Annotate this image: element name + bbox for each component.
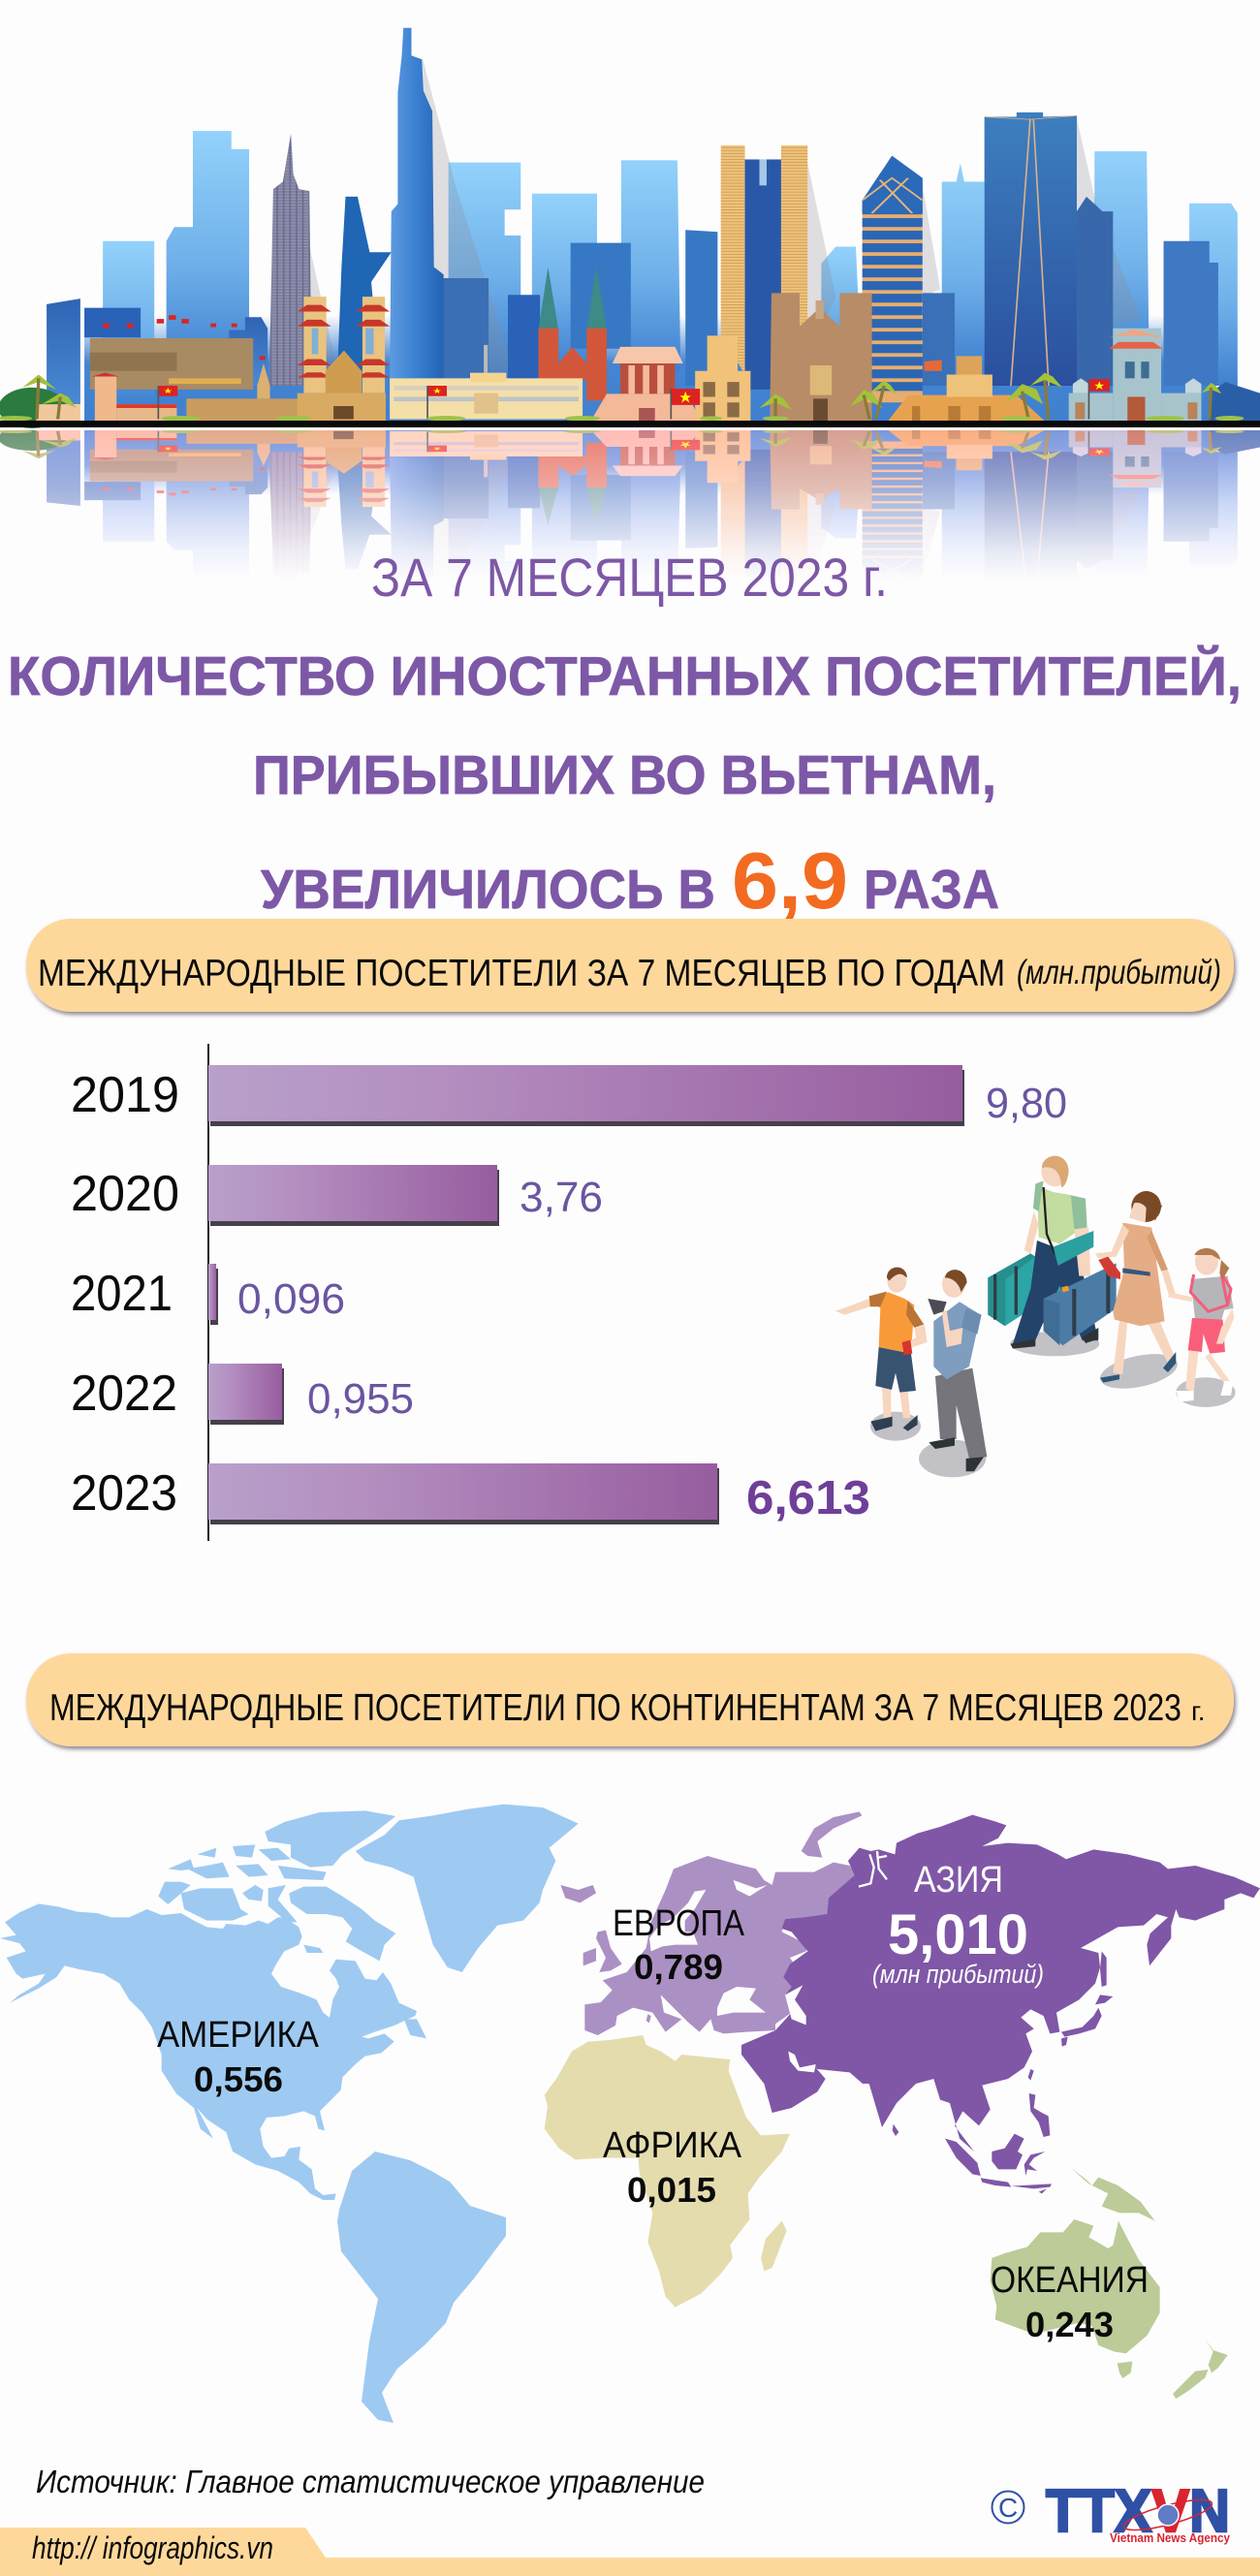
label: Europe: 0,789 — [634, 1947, 723, 1987]
label: Americas: АМЕРИКА — [157, 2015, 320, 2056]
label: Oceania — [991, 2260, 1149, 2344]
illustration: mirrored skyline reflection — [0, 430, 1260, 572]
bar 2021 — [71, 1264, 345, 1325]
headline line 2: ПРИБЫВШИХ ВО ВЬЕТНАМ, — [253, 744, 996, 806]
bar 2023: 2023 — [71, 1465, 177, 1522]
section heading pill: by continent — [26, 1653, 1234, 1746]
tall man's suitcases and figure — [988, 1253, 1063, 1326]
label: Oceania: 0,243 — [1025, 2305, 1114, 2344]
bar 2022 — [71, 1364, 414, 1425]
label: Asia — [872, 1860, 1044, 1989]
label: Europe: ЕВРОПА — [613, 1903, 745, 1944]
label: Africa — [603, 2125, 742, 2210]
footer band with url: http:// infographics.vn — [32, 2530, 273, 2565]
label: Asia: (млн прибытий) — [872, 1960, 1044, 1989]
map region: Africa — [545, 2035, 790, 2308]
source note: Источник: Главное статистическое управление — [36, 2464, 705, 2499]
logo: TTXVN Vietnam News Agency: C — [998, 2493, 1018, 2523]
bar 2021: 2021 — [71, 1266, 173, 1322]
man with camera — [935, 1368, 987, 1459]
title block — [8, 547, 1242, 926]
section heading pill: by year: МЕЖДУНАРОДНЫЕ ПОСЕТИТЕЛИ ЗА 7 МЕСЯЦЕВ ПО ГОДАМ — [38, 953, 1005, 994]
label: Oceania: ОКЕАНИЯ — [991, 2260, 1149, 2301]
section heading pill: by continent: г. — [1191, 1696, 1206, 1726]
highlighted multiplier: 6,9 — [732, 835, 848, 926]
logo: TTXVN Vietnam News Agency: TTXVN — [1046, 2478, 1230, 2545]
bar 2020 — [71, 1165, 603, 1226]
subtitle: ЗА 7 МЕСЯЦЕВ 2023 г. — [371, 547, 888, 608]
bar 2021: 0,096 — [237, 1275, 345, 1323]
boy — [882, 1388, 910, 1418]
headline line 1: КОЛИЧЕСТВО ИНОСТРАННЫХ ПОСЕТИТЕЛЕЙ, — [8, 644, 1242, 707]
bar 2022: 2022 — [71, 1366, 177, 1422]
girl — [1185, 1350, 1231, 1393]
map region: Asia — [741, 1815, 1260, 2193]
illustration: city skyline with landmarks — [0, 28, 1260, 428]
label: Europe — [613, 1903, 745, 1987]
label: Americas: 0,556 — [194, 2059, 283, 2099]
label: Africa: АФРИКА — [603, 2125, 742, 2166]
bar 2023: 6,613 — [746, 1472, 870, 1524]
bar 2022: 0,955 — [307, 1375, 414, 1423]
label: Americas — [157, 2015, 320, 2099]
label: Asia: 5,010 — [888, 1903, 1028, 1966]
map region: Europe — [560, 1811, 862, 2035]
axis — [207, 1044, 209, 1541]
bar 2020: 2020 — [71, 1166, 179, 1222]
bar 2019: 2019 — [71, 1067, 179, 1123]
ground line — [0, 421, 1260, 427]
section heading pill: by year — [26, 919, 1234, 1012]
headline word: РАЗА — [864, 859, 999, 921]
greenland — [356, 1805, 579, 1972]
illustration: family of tourists with suitcases — [835, 1155, 1236, 1477]
world map with regional values — [0, 1805, 1260, 2423]
woman — [1113, 1321, 1176, 1374]
label: Africa: 0,015 — [627, 2170, 716, 2210]
bar 2020: 3,76 — [520, 1174, 603, 1221]
map region: Oceania — [991, 2168, 1228, 2399]
map region: South America — [337, 2152, 506, 2423]
logo: TTXVN Vietnam News Agency: Vietnam News Agency — [1110, 2530, 1231, 2545]
bar 2019: 9,80 — [986, 1080, 1067, 1127]
bar chart: visitors by year — [71, 1044, 1067, 1541]
bar 2023 — [71, 1463, 870, 1524]
map region: Americas — [0, 1805, 579, 2200]
footer band with url — [0, 2528, 1260, 2576]
headline line 3: УВЕЛИЧИЛОСЬ В — [261, 859, 715, 921]
bar 2019 — [71, 1065, 1067, 1127]
label: Asia: АЗИЯ — [914, 1860, 1003, 1901]
